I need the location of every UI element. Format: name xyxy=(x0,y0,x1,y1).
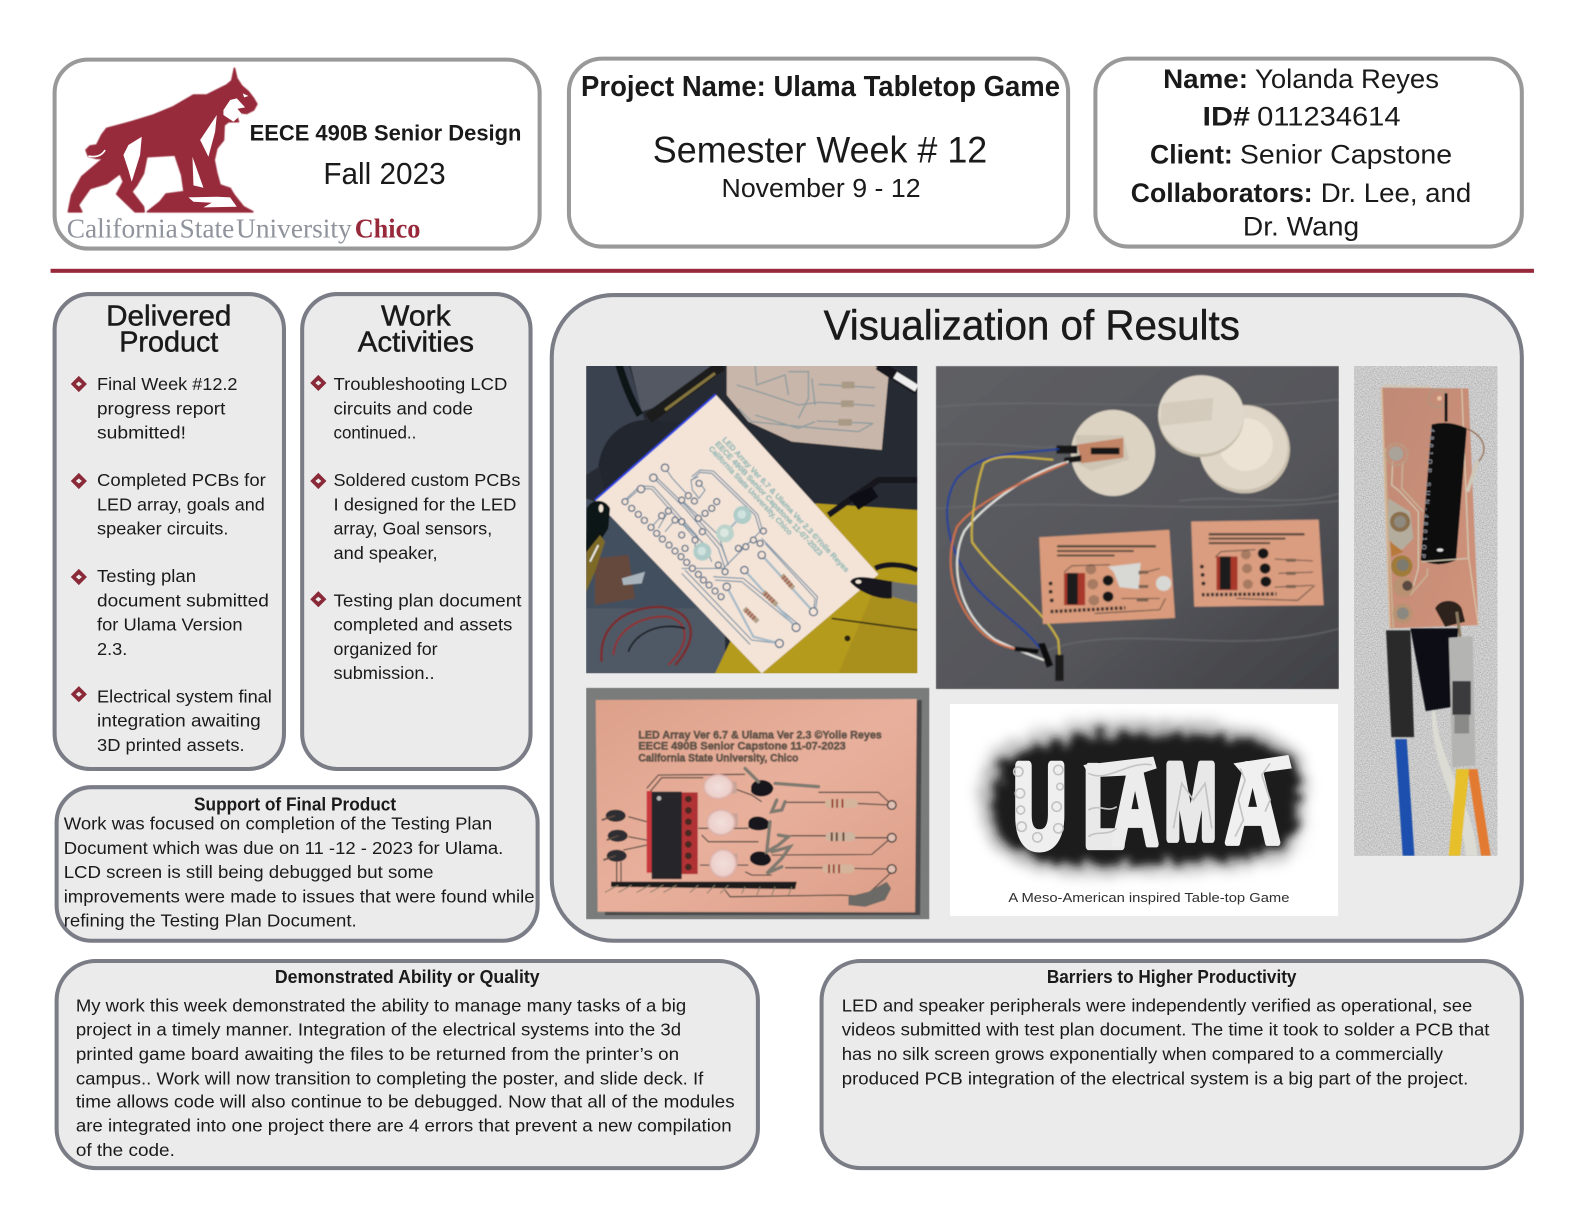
heading: Visualization of Results xyxy=(824,303,1240,349)
panel: visualization of results xyxy=(552,295,1522,941)
heading xyxy=(358,299,474,358)
heading: Demonstrated Ability or Quality xyxy=(275,967,540,987)
name xyxy=(1163,63,1439,94)
photo: soldered LED array PCB: California State University, Chico xyxy=(638,752,799,764)
paragraph: has no silk screen grows exponentially when compared to a commercially xyxy=(842,1044,1443,1064)
image: Ulama game logo: U xyxy=(1014,741,1066,872)
heading: Delivered xyxy=(106,299,231,331)
collaborators: Dr. Lee, and xyxy=(1321,177,1471,208)
bullet text: Completed PCBs for xyxy=(97,470,266,490)
image: Ulama game logo: M xyxy=(1165,741,1216,861)
bullet text: document submitted xyxy=(97,590,269,610)
client: Senior Capstone xyxy=(1240,139,1452,170)
panel: course header xyxy=(55,60,540,249)
client xyxy=(1150,139,1452,170)
panel: barriers to higher productivity xyxy=(822,961,1522,1168)
text: university wordmark: California State University xyxy=(67,213,352,243)
bullet icons xyxy=(310,375,326,607)
bullet text: integration awaiting xyxy=(97,711,261,731)
paragraph xyxy=(76,995,735,1160)
bullet text: Troubleshooting LCD xyxy=(333,374,507,394)
bullet text: continued.. xyxy=(333,423,416,443)
image: Ulama game logo: L xyxy=(1084,743,1124,870)
heading xyxy=(106,299,231,358)
paragraph: refining the Testing Plan Document. xyxy=(64,911,357,931)
term: Fall 2023 xyxy=(323,158,446,191)
paragraph: LED and speaker peripherals were independently verified as operational, see xyxy=(842,995,1472,1015)
name: Name: xyxy=(1163,63,1248,94)
paragraph: project in a timely manner. Integration of the electrical systems into the 3d xyxy=(76,1020,681,1040)
id xyxy=(1203,100,1401,131)
collaborators xyxy=(1131,177,1471,241)
bullet text: and speaker, xyxy=(333,543,438,563)
bullet text: Electrical system final xyxy=(97,686,272,706)
paragraph: printed game board awaiting the files to be returned from the printer’s on xyxy=(76,1044,679,1064)
paragraph: produced PCB integration of the electrical system is a big part of the project. xyxy=(842,1068,1468,1088)
photo: unpopulated PCB held in clips: California State University, Chico xyxy=(707,444,794,537)
text: university wordmark: Chico xyxy=(355,213,420,243)
panel: project name and week xyxy=(569,59,1068,247)
heading: Work xyxy=(381,299,452,331)
bullet text xyxy=(97,374,272,755)
panel: work activities xyxy=(302,294,531,769)
photo: soldered LED array PCB: LED Array Ver 6.7 & Ulama Ver 2.3 ©Yolie Reyes xyxy=(638,729,882,741)
panel: support of final product xyxy=(57,787,538,941)
heading: Product xyxy=(119,326,218,358)
bullet text: Final Week #12.2 xyxy=(97,374,237,394)
paragraph: time allows code will also continue to be debugged. Now that all of the modules xyxy=(76,1091,735,1111)
image: Ulama game logo: A xyxy=(1112,745,1158,868)
id: ID# xyxy=(1203,100,1250,131)
bullet text: completed and assets xyxy=(333,615,513,635)
client: Client: xyxy=(1150,139,1233,170)
paragraph: My work this week demonstrated the ability to manage many tasks of a big xyxy=(76,995,686,1015)
bullet text: circuits and code xyxy=(333,398,473,418)
photo: speaker PCB with connectors: 4801OP SUN-4801OP xyxy=(1419,428,1435,559)
panel: student info xyxy=(1095,59,1522,247)
photo: soldered LED array PCB: EECE 490B Senior Capstone 11-07-2023 xyxy=(638,741,846,753)
photo: unpopulated PCB held in clips xyxy=(586,363,917,673)
paragraph: Work was focused on completion of the Testing Plan xyxy=(64,814,492,834)
bullet text: 3D printed assets. xyxy=(97,735,245,755)
paragraph: Document which was due on 11 -12 - 2023 for Ulama. xyxy=(64,838,503,858)
image: Ulama game logo: A Meso-American inspired Table-top Game xyxy=(1008,890,1289,905)
image: Ulama game logo xyxy=(950,704,1338,916)
bullet text: submission.. xyxy=(333,663,435,683)
paragraph: LCD screen is still being debugged but some xyxy=(64,862,434,882)
date range: November 9 - 12 xyxy=(722,173,921,203)
photo: soldered LED array PCB xyxy=(586,688,929,919)
photo: unpopulated PCB held in clips: EECE 490B Senior Capstone 11-07-2023 xyxy=(713,439,825,558)
bullet text xyxy=(333,374,522,683)
paragraph: campus.. Work will now transition to completing the poster, and slide deck. If xyxy=(76,1068,703,1088)
heading: Activities xyxy=(358,326,474,358)
bullet text: I designed for the LED xyxy=(333,494,516,514)
bullet icons xyxy=(71,376,87,702)
bullet text: progress report xyxy=(97,398,225,418)
name: Yolanda Reyes xyxy=(1255,63,1439,94)
bullet text: speaker circuits. xyxy=(97,519,228,539)
paragraph: videos submitted with test plan document. The time it took to solder a PCB that xyxy=(842,1020,1490,1040)
bullet text: organized for xyxy=(333,639,438,659)
paragraph: are integrated into one project there are 4 errors that prevent a new compilation xyxy=(76,1116,732,1136)
bullet text: LED array, goals and xyxy=(97,494,265,514)
bullet text: Soldered custom PCBs xyxy=(333,470,521,490)
panel: delivered product xyxy=(55,294,284,769)
panel: demonstrated ability or quality xyxy=(57,961,758,1168)
heading: Support of Final Product xyxy=(194,794,396,814)
paragraph: improvements were made to issues that were found while xyxy=(64,886,535,906)
photo: PCBs and goal discs on table xyxy=(936,366,1339,689)
image: Ulama game logo: A xyxy=(1225,741,1280,868)
paragraph xyxy=(842,995,1490,1088)
paragraph xyxy=(64,814,535,931)
bullet text: Testing plan xyxy=(97,566,196,586)
photo: unpopulated PCB held in clips: LED Array Ver 6.7 & Ulama Ver 2.3 ©Yolie Reyes xyxy=(720,435,851,574)
semester week: Semester Week # 12 xyxy=(653,129,987,171)
bullet text: for Ulama Version xyxy=(97,615,243,635)
collaborators: Dr. Wang xyxy=(1243,210,1359,241)
bullet text: array, Goal sensors, xyxy=(333,519,492,539)
icon: Chico wildcat logo xyxy=(68,68,257,212)
bullet text: submitted! xyxy=(97,423,186,443)
bullet text: Testing plan document xyxy=(333,590,522,610)
course name: EECE 490B Senior Design xyxy=(250,120,521,145)
photo: speaker PCB with connectors xyxy=(1354,363,1497,856)
collaborators: Collaborators: xyxy=(1131,177,1313,208)
bullet text: 2.3. xyxy=(97,639,127,659)
paragraph: of the code. xyxy=(76,1140,175,1160)
id: 011234614 xyxy=(1257,100,1401,131)
heading: Barriers to Higher Productivity xyxy=(1047,967,1297,987)
project name: Project Name: Ulama Tabletop Game xyxy=(581,70,1060,102)
